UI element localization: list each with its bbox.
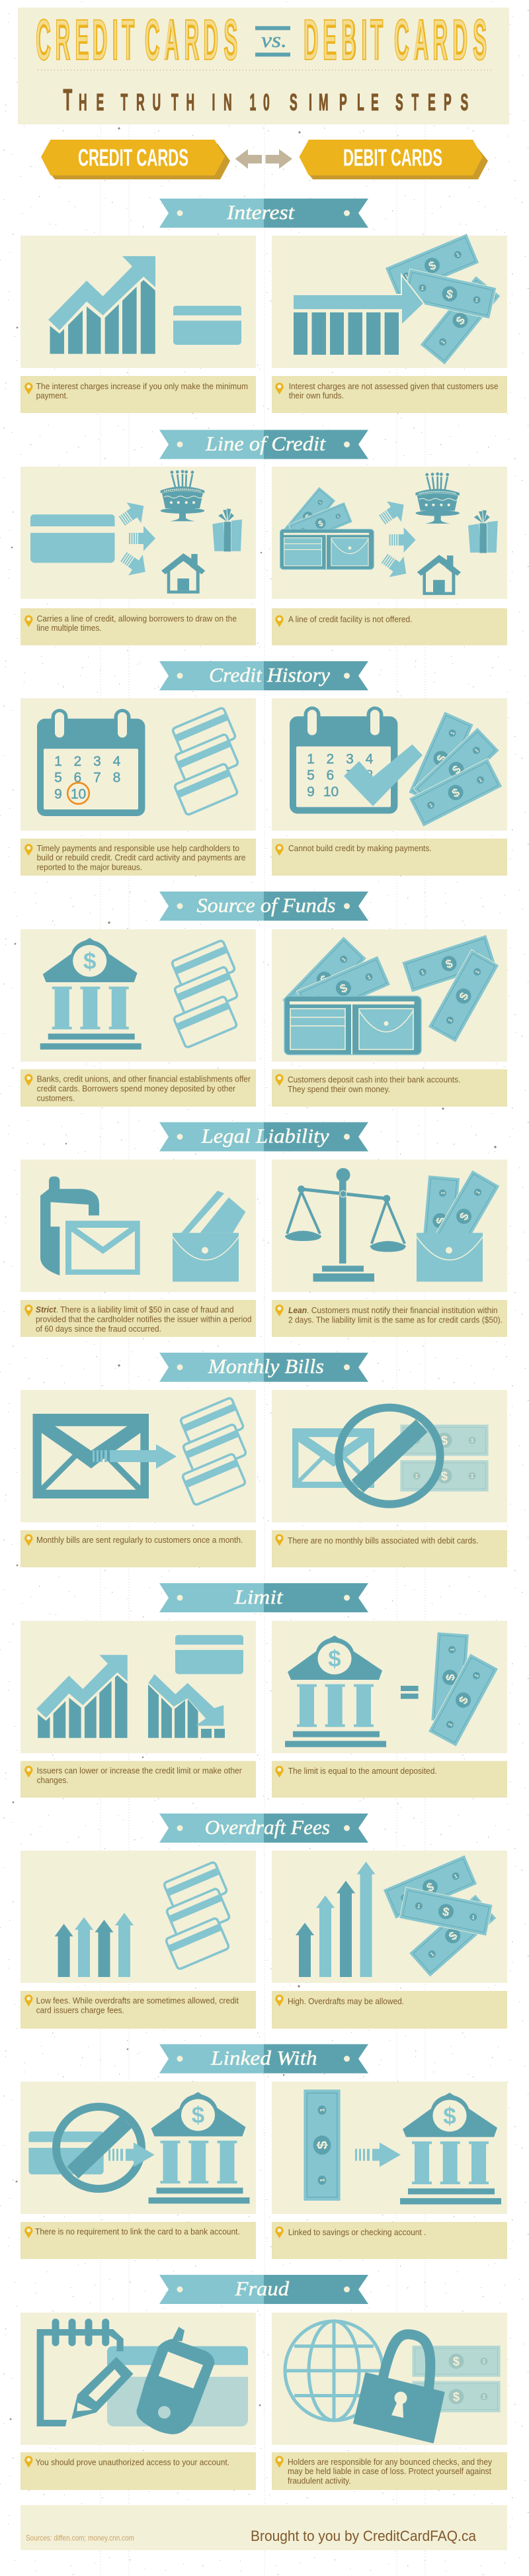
caption: credit overdraft <box>20 1991 256 2029</box>
sources: Sources: diffen.com; money.cnn.com <box>26 2534 134 2543</box>
caption: debit overdraft <box>272 1991 507 2029</box>
title: credit cards: CREDIT CARDS <box>36 10 237 71</box>
button: debit cards <box>299 140 488 179</box>
ribbon: limit: Limit <box>233 1585 284 1608</box>
ribbon: limit <box>159 1583 368 1612</box>
caption: credit linked: There is no requirement to link the card to a bank account. <box>35 2227 240 2236</box>
panel: debit fraud <box>272 2313 507 2445</box>
section 4: source of funds <box>20 892 507 1107</box>
button: credit cards: CREDIT CARDS <box>78 144 188 171</box>
panel: credit history calendar <box>20 698 256 831</box>
section 3: credit history <box>20 661 507 876</box>
ribbon: line of credit <box>159 430 368 459</box>
caption: credit limit: changes. <box>37 1775 69 1785</box>
caption: credit overdraft: card issuers charge fees. <box>36 2005 124 2015</box>
caption: credit interest: The interest charges increase if you only make the minimum <box>36 381 248 391</box>
caption: debit interest: Interest charges are not assessed given that customers use <box>289 381 499 391</box>
versus mark: vs. <box>261 28 287 52</box>
caption: debit line of credit <box>272 608 507 645</box>
ribbon: line of credit: Line of Credit <box>205 432 326 455</box>
caption: debit linked: Linked to savings or checking account . <box>288 2227 426 2237</box>
ribbon: monthly bills <box>159 1353 368 1382</box>
footer panel <box>20 2505 507 2550</box>
caption: debit history <box>272 839 507 876</box>
ribbon: legal liability <box>159 1123 368 1152</box>
caption: credit interest: payment. <box>36 391 68 400</box>
section 9: linked with <box>20 2044 507 2259</box>
caption: debit linked <box>272 2222 507 2259</box>
caption: credit linked <box>20 2222 256 2259</box>
ribbon: fraud: Fraud <box>235 2277 290 2300</box>
section 7: limit <box>20 1583 507 1798</box>
ribbon: interest: Interest <box>226 201 296 224</box>
panel: credit overdraft <box>20 1851 256 1983</box>
ribbon: interest <box>159 199 368 228</box>
ribbon: credit history: Credit History <box>209 663 330 686</box>
caption: debit fraud: may be held liable in case of loss. Protect yourself against <box>288 2466 491 2476</box>
caption: credit monthly bills <box>20 1530 256 1567</box>
caption: credit liability: Strict. There is a liability limit of $50 in case of fraud and <box>36 1305 234 1314</box>
caption: credit overdraft: Low fees. While overdrafts are sometimes allowed, credit <box>36 1996 239 2005</box>
versus mark <box>255 26 290 57</box>
caption: debit liability: Lean. Customers must notify their financial institution within <box>288 1305 498 1315</box>
caption: credit source: Banks, credit unions, and other financial establishments offer <box>37 1074 251 1084</box>
ribbon: fraud <box>159 2275 368 2304</box>
ribbon: linked with: Linked With <box>210 2047 317 2069</box>
ribbon: credit history <box>159 661 368 690</box>
panel: credit liability <box>20 1160 256 1292</box>
title: debit cards: DEBIT CARDS <box>304 10 487 71</box>
ribbon: legal liability: Legal Liability <box>201 1124 329 1148</box>
caption: credit fraud <box>20 2452 256 2490</box>
caption: credit liability: provided that the cardholder notifies the issuer within a period <box>36 1314 252 1324</box>
panel: debit limit <box>272 1621 507 1753</box>
ribbon: monthly bills: Monthly Bills <box>208 1355 324 1378</box>
panel: credit fraud <box>20 2313 256 2445</box>
caption: credit source: credit cards. Borrowers spend money deposited by other <box>37 1083 236 1093</box>
caption: debit interest: their own funds. <box>289 391 344 400</box>
caption: debit source: Customers deposit cash into their bank accounts. <box>288 1075 460 1084</box>
caption: debit fraud: fraudulent activity. <box>288 2475 351 2486</box>
caption: debit interest <box>272 376 507 413</box>
caption: credit fraud: You should prove unauthorized access to your account. <box>36 2457 229 2467</box>
caption: credit limit <box>20 1761 256 1798</box>
caption: debit monthly bills: There are no monthly bills associated with debit cards. <box>288 1536 479 1545</box>
header panel <box>18 8 509 124</box>
section 10: fraud <box>20 2275 507 2490</box>
panel: debit overdraft <box>272 1851 507 1983</box>
caption: debit monthly bills <box>272 1530 507 1567</box>
panel: debit line of credit <box>272 467 507 599</box>
caption: debit source <box>272 1070 507 1107</box>
panel: credit linked <box>20 2082 256 2214</box>
button: credit cards <box>41 140 230 179</box>
caption: credit line of credit: line multiple times. <box>37 623 102 633</box>
panel: credit line of credit <box>20 467 256 599</box>
section 6: monthly bills <box>20 1353 507 1567</box>
section 8: overdraft fees <box>20 1814 507 2029</box>
panel: debit interest bills <box>272 234 507 368</box>
section 1: interest <box>20 199 507 413</box>
caption: credit history <box>20 839 256 876</box>
caption: debit limit <box>272 1761 507 1798</box>
title: credit cards: CREDIT CARDS <box>36 10 237 71</box>
caption: credit line of credit: Carries a line of credit, allowing borrowers to draw on the <box>37 614 237 623</box>
caption: debit limit: The limit is equal to the amount deposited. <box>288 1766 437 1776</box>
panel: credit source <box>20 929 256 1062</box>
caption: debit line of credit: A line of credit facility is not offered. <box>288 614 413 624</box>
ribbon: linked with <box>159 2044 368 2073</box>
panel: debit history calendar <box>272 698 507 831</box>
caption: credit source: customers. <box>37 1093 75 1103</box>
caption: debit overdraft: High. Overdrafts may be allowed. <box>288 1996 404 2006</box>
caption: credit interest <box>20 376 256 413</box>
ribbon: overdraft fees: Overdraft Fees <box>205 1816 330 1839</box>
caption: credit history: Timely payments and responsible use help cardholders to <box>37 843 239 853</box>
caption: debit history: Cannot build credit by making payments. <box>288 843 432 853</box>
panel: credit monthly bills <box>20 1390 256 1522</box>
title: debit cards: DEBIT CARDS <box>304 10 487 71</box>
caption: credit monthly bills: Monthly bills are sent regularly to customers once a month. <box>36 1535 243 1545</box>
section 5: legal liability <box>20 1123 507 1337</box>
caption: credit limit: Issuers can lower or increase the credit limit or make other <box>37 1766 242 1775</box>
credit line: Brought to you by CreditCardFAQ.ca <box>251 2528 477 2544</box>
caption: debit fraud <box>272 2452 507 2490</box>
caption: credit liability: of 60 days since the fraud occurred. <box>36 1324 161 1334</box>
panel: debit monthly bills <box>272 1390 507 1522</box>
ribbon: overdraft fees <box>159 1814 368 1843</box>
panel: debit source <box>272 929 507 1062</box>
caption: debit liability <box>272 1300 507 1337</box>
panel: credit limit <box>20 1621 256 1753</box>
ribbon: source of funds <box>159 892 368 921</box>
caption: credit liability <box>20 1300 256 1337</box>
ribbon: source of funds: Source of Funds <box>197 894 336 917</box>
caption: credit line of credit <box>20 608 256 645</box>
caption: debit liability: 2 days. The liability limit is the same as for credit cards ($50). <box>288 1314 503 1325</box>
arrow: between card types <box>235 149 292 169</box>
panel: debit linked <box>272 2082 507 2214</box>
panel: debit liability <box>272 1160 507 1292</box>
section 2: line of credit <box>20 430 507 645</box>
caption: debit source: They spend their own money. <box>288 1084 390 1094</box>
caption: debit fraud: Holders are responsible for any bounced checks, and they <box>288 2457 492 2467</box>
button: debit cards: DEBIT CARDS <box>343 144 442 171</box>
subtitle: T HE TRUTH IN 10 SIMPLE STEPS <box>63 83 468 117</box>
caption: credit history: build or rebuild credit. Credit card activity and payments are <box>37 852 245 862</box>
caption: credit source <box>20 1070 256 1107</box>
panel: credit interest chart <box>20 236 256 368</box>
caption: credit history: reported to the major bureaus. <box>37 862 142 872</box>
